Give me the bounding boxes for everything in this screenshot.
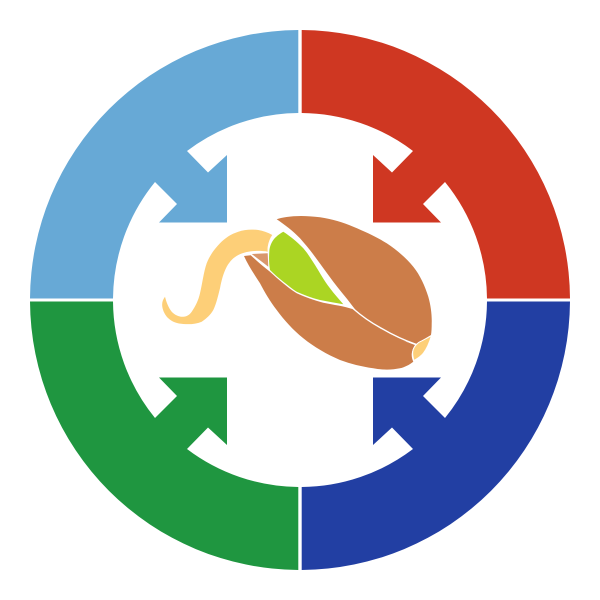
panel: red quadrant with arrow <box>302 30 570 298</box>
seed green embryo <box>269 232 343 304</box>
panel: blue quadrant with arrow <box>30 30 298 298</box>
seed tip cap <box>413 336 432 360</box>
seed husk seam line <box>353 308 416 344</box>
panel: dark blue quadrant with arrow <box>302 302 570 570</box>
seed upper husk <box>277 216 432 344</box>
icon: germinating seed <box>162 216 432 370</box>
seed tan wedge <box>252 253 268 267</box>
seed root sprout <box>162 230 272 324</box>
panel: green quadrant with arrow <box>30 302 298 570</box>
seed lower husk <box>244 255 415 370</box>
